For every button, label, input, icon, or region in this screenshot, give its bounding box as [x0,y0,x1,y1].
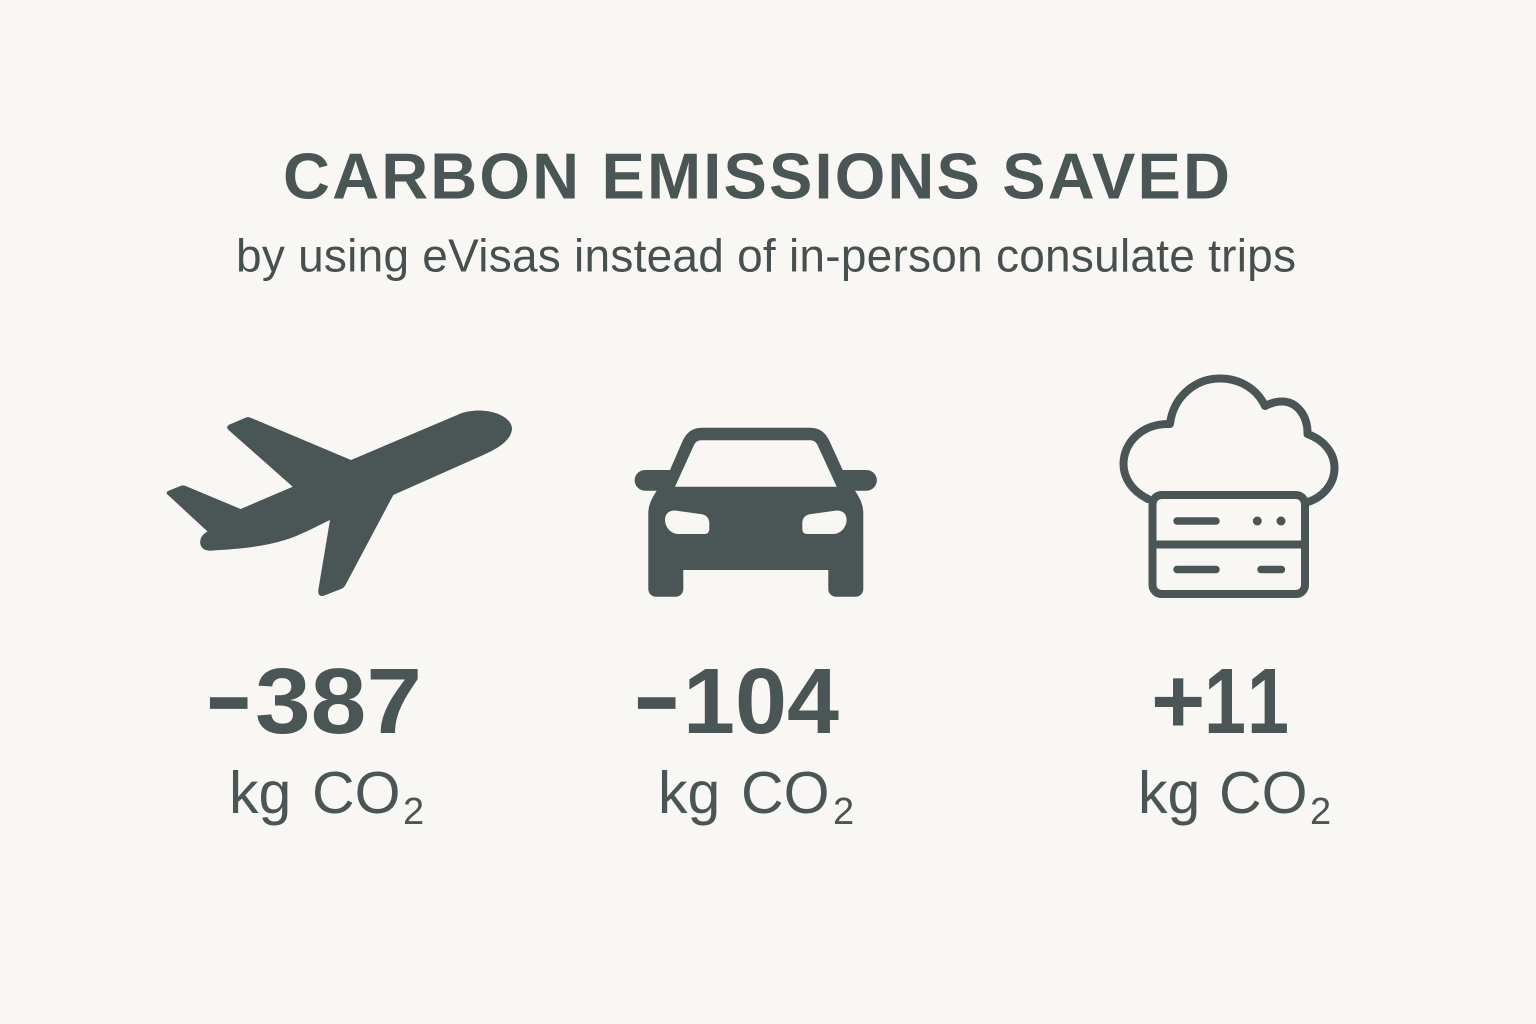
stat: car -104: 104 [683,649,839,753]
stat: car -104: − [636,650,678,754]
title: CARBON EMISSIONS SAVED [283,140,1230,212]
unit: car kg CO2: CO [741,760,830,826]
unit: car kg CO2: 2 [833,791,854,833]
stat: server +11: 1 [1204,649,1246,753]
unit: car kg CO2 [658,760,854,833]
stat: flight -387: − [208,650,250,754]
icon: cloud server [1124,378,1334,594]
icon: car [635,428,877,597]
subtitle: by using eVisas instead of in-person consulate trips [236,230,1296,282]
stat: server +11: 1 [1247,649,1289,753]
stat: server +11: + [1151,649,1205,753]
stat: flight -387: 387 [255,649,422,753]
icon: airplane [167,410,512,596]
unit: car kg CO2: kg [658,760,720,826]
unit: server kg CO2: CO [1219,760,1308,826]
unit: flight kg CO2 [229,760,424,833]
unit: flight kg CO2: kg [229,760,291,826]
unit: server kg CO2 [1138,760,1331,833]
unit: flight kg CO2: 2 [403,791,424,833]
unit: server kg CO2: kg [1138,760,1200,826]
stat: server +11 [1151,649,1289,753]
unit: flight kg CO2: CO [312,760,400,826]
unit: server kg CO2: 2 [1310,791,1331,833]
